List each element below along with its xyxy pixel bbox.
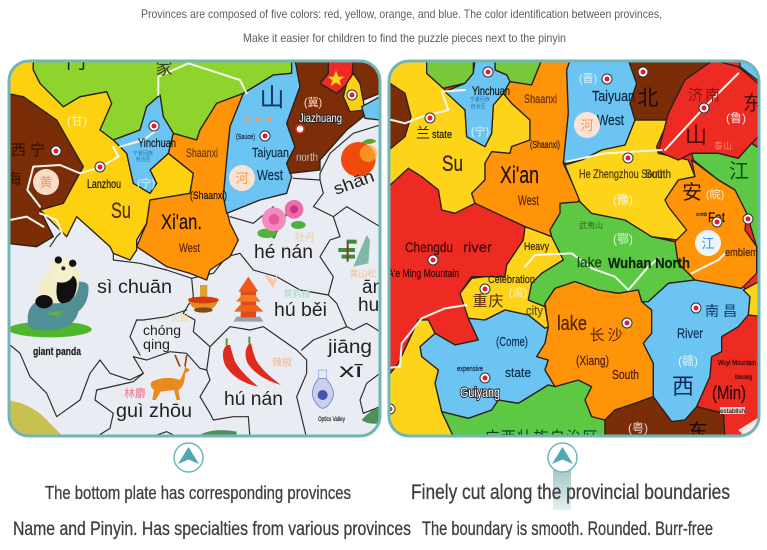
text: base plate labels: hé nán [254,242,313,263]
map pins left [51,90,357,172]
text: piece labels: A'e Ming Mountain [388,268,459,280]
text: piece labels: 自治区 [470,103,486,110]
heading: intro text: Make it easier for children to find the puzzle pieces next to the pinyin [243,31,566,45]
text: piece labels: South [612,367,639,382]
text: piece labels: Su [442,151,463,176]
icon: Beijing star [328,71,344,86]
text: base plate labels: West [257,167,284,184]
text: piece labels: 济南 [688,87,720,104]
text: base plate labels: 黄山松 [349,268,377,279]
text: piece labels: river [463,239,492,255]
text: piece labels: West [518,192,539,208]
panel: base plate with pinyin [6,50,383,438]
icon: bottom landscape [200,430,237,434]
text: base plate labels: (宁) [137,176,155,190]
text: piece labels: (粤) [628,420,648,435]
icon: hot pot [188,285,219,313]
text: piece labels: 泰山 [714,140,732,151]
icon: jiang seal: 江 [701,236,715,251]
heading: intro text [141,7,662,45]
text: piece labels: lake [557,313,587,335]
icon: river seal right [574,112,600,138]
text: piece labels: lake [577,254,602,270]
icon: musk deer [151,355,190,400]
puzzle pieces [7,60,380,280]
icon: crane flower [265,273,278,288]
icon: panda-side province seal: 黄 [39,175,53,190]
icon: river seal right: 河 [580,118,594,133]
text: piece labels: (鲁) [726,111,746,125]
text: piece labels: state [432,129,452,141]
panel: cut puzzle pieces [385,60,763,446]
text: base plate labels: 火锅 [171,313,189,323]
icon: chili peppers [223,337,281,387]
text: base plate labels: 牡丹 [295,231,315,244]
text: piece labels: Xi'an [500,162,539,189]
text: base plate labels: 海 [6,171,22,188]
icon: panda-side province seal [33,169,59,195]
text: piece labels: (宁) [471,124,489,138]
text: piece labels: 东 [688,420,708,443]
text: piece labels: (晋) [579,72,597,85]
text: base plate labels: shān [331,167,377,199]
text: piece labels: 长沙 [590,327,622,344]
text: piece labels: Shaanxi [524,92,557,106]
text: base plate labels: Xi'an. [161,211,202,234]
text: base plate labels: 辣椒 [272,356,292,369]
text: piece labels: 江 [729,160,749,183]
text: piece labels: Guiyang [460,384,500,400]
icon: rice field [10,400,61,434]
icon: pine right [362,407,380,424]
caption: cut edges [411,481,730,540]
text: base plate labels: qing [143,336,170,352]
text: base plate labels: (Shaanxi) [190,190,227,202]
text: piece labels: (渝) [509,285,527,299]
text: base plate labels: Taiyuan [252,145,289,160]
heading: intro text: Provinces are composed of five colors: red, yellow, orange, and blue. The color identification between provinces, [141,7,662,21]
icon: up arrow right [548,443,577,472]
text: piece labels: (Come) [496,334,528,349]
text: base plate labels: chóng [143,322,181,338]
smudge under right arrow [553,470,571,510]
icon: vase [312,370,333,408]
text: piece labels: (Xiang) [576,353,609,368]
text: piece labels: 南昌 [705,303,737,319]
text: base plate labels: 宁夏回族 [133,150,153,157]
text: piece labels: Wuyi Mountain [718,360,756,367]
text: piece labels: 兰 [416,125,430,141]
text: piece labels: River [677,325,703,341]
text: base plate labels: guì zhōu [116,401,192,422]
text: piece labels: expensive [457,366,483,373]
icon: up arrow left [174,443,203,472]
text: piece labels: 安 [682,181,702,204]
text: piece labels: West [597,112,625,129]
text: base plate labels: (甘) [67,114,87,128]
text: piece labels: 北 [638,87,658,110]
text: piece labels: 广西壮族自治区 [484,429,598,446]
text: base plate labels: 山 [259,84,285,112]
text: piece labels: Heavy [524,241,549,253]
text: piece labels: 重庆 [472,293,504,310]
text: base plate labels: Lanzhou [87,177,121,191]
text: base plate labels: hú nán [224,389,283,410]
text: piece labels: South [645,167,671,181]
text: piece labels: state [505,365,531,380]
province boundary lines [10,125,380,438]
text: base plate labels: West [179,241,201,255]
caption: bottom plate: Name and Pinyin. Has specialties from various provinces [13,519,411,540]
icon: apple [341,139,377,177]
text: piece labels: (Shaanxi) [530,140,560,151]
text: piece labels: Wuhan North [608,255,690,272]
icon: jiang seal [695,230,721,256]
text: piece labels: establish [720,409,745,415]
text: base plate labels: Optics Valley [318,416,346,423]
rivers [385,73,738,368]
text: piece labels: (Min) [712,383,746,403]
icon: river seal: 河 [235,171,249,186]
text: base plate labels: 自治区 [135,156,151,163]
text: piece labels: Celebration [488,274,535,286]
text: base plate labels: (Sauce) [236,132,255,141]
text: base plate labels: jiāng [327,337,372,358]
text: base plate labels: ān [362,277,383,298]
text: base plate labels: ▲▲▲ [242,113,274,125]
icon: yellow crane tower [233,277,263,322]
text: base plate labels [6,50,383,423]
text: base plate labels: Su [111,198,131,223]
text: base plate labels: 门 [66,50,86,73]
text: piece labels: 西 [672,374,694,399]
text: piece labels: Fat [708,209,725,225]
rivers [10,63,247,237]
text: piece labels: He Zhengzhou South [579,167,665,181]
text: piece labels: blessing [735,375,752,381]
text: piece labels: (皖) [706,187,724,201]
icon: coast burst [738,418,758,434]
text: piece labels: 宁夏回族 [470,96,490,103]
text: piece labels: (鄂) [613,232,633,246]
text: base plate labels: hú běi [274,300,327,321]
text: base plate labels: (冀) [304,95,322,109]
text: piece labels: city [526,303,543,318]
text: piece labels: comb [696,212,707,218]
text: base plate labels: 林麝 [124,386,146,400]
text: base plate labels: 西宁 [11,142,45,159]
text: piece labels [388,72,763,446]
text: piece labels: Taiyuan [592,88,635,105]
caption: bottom plate: The bottom plate has corresponding provinces [45,483,351,503]
text: base plate labels: hu [358,295,379,316]
icon: peony flowers [257,200,306,238]
caption: bottom plate [13,483,411,540]
text: piece labels: Chengdu [405,239,453,255]
text: base plate labels: sì chuān [97,277,172,298]
text: piece labels: (豫) [613,193,633,207]
text: base plate labels: Jiazhuang [299,111,342,125]
text: base plate labels: 家 [156,59,172,78]
text: piece labels: emblem [725,247,758,259]
puzzle pieces [385,60,762,440]
text: piece labels: 东 [743,92,763,115]
text: piece labels: Yinchuan [472,84,510,98]
map pins right [385,67,753,414]
icon: river seal [229,165,255,191]
icon: mountain and pine [338,235,370,267]
text: base plate labels: Shaanxi [186,146,218,160]
text: piece labels: (赣) [678,354,698,368]
text: base plate labels: north [296,150,318,164]
text: base plate labels: xī [339,361,364,382]
text: piece labels: 武夷山 [579,220,603,230]
text: piece labels: 山 [685,123,707,148]
text: base plate labels: giant panda [33,346,82,358]
text: base plate labels: 黄鹤楼 [283,288,311,299]
text: base plate labels: Yinchuan [138,136,176,150]
icon: panda on rock [8,256,92,337]
